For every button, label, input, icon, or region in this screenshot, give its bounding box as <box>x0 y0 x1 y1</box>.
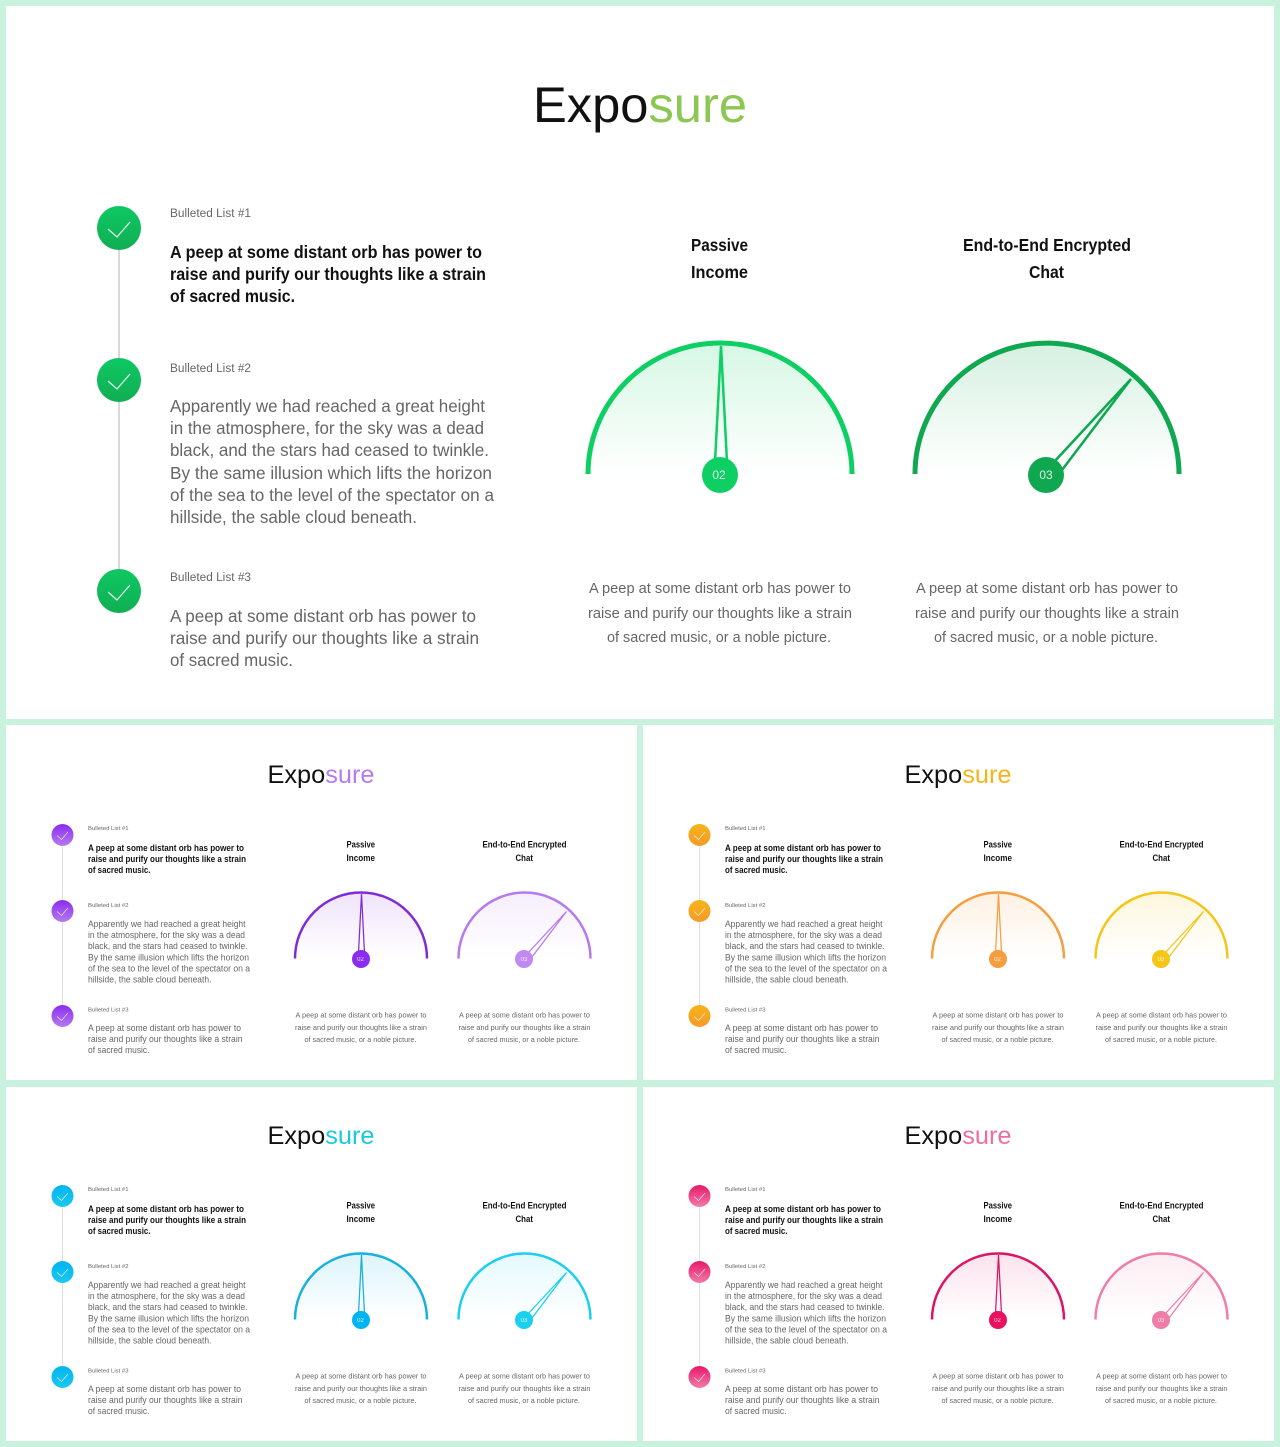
gauge: 03 <box>458 893 590 968</box>
panel: purple slide <box>6 725 637 1080</box>
gauge: 02 <box>932 892 1064 968</box>
gauge: 02: 02 <box>712 468 726 482</box>
gauge heading: End-to-End Encrypted Chat: Chat <box>516 1214 533 1224</box>
gauge description right <box>1096 1372 1228 1405</box>
list item 2: Apparently we had reached a great height <box>88 919 246 929</box>
list item 2 <box>88 903 250 984</box>
list item 2: Bulleted List #2 <box>725 903 766 909</box>
list item 1: Bulleted List #1 <box>88 826 128 832</box>
list item 2: Apparently we had reached a great height <box>725 1280 883 1290</box>
gauge: 02 <box>588 343 852 493</box>
gauge heading: End-to-End Encrypted Chat: End-to-End Encrypted <box>963 235 1131 255</box>
list item 3: of sacred music. <box>88 1045 150 1055</box>
gauge description right: A peep at some distant orb has power to <box>1096 1372 1227 1380</box>
timeline list <box>97 206 494 670</box>
list item 3: Bulleted List #3 <box>88 1008 128 1014</box>
list item 2: of the sea to the level of the spectator on a <box>725 1324 887 1334</box>
gauge description left: raise and purify our thoughts like a strain <box>295 1384 427 1393</box>
list icon 1 <box>52 1185 74 1207</box>
gauge heading: Passive Income <box>984 840 1012 863</box>
list item 2 <box>725 1264 887 1346</box>
list item 2: black, and the stars had ceased to twinkle. <box>88 1302 248 1312</box>
list item 2: in the atmosphere, for the sky was a dead <box>725 1291 882 1301</box>
list item 2: Bulleted List #2 <box>170 363 251 375</box>
gauge heading: End-to-End Encrypted Chat: End-to-End Encrypted <box>1120 840 1204 850</box>
list item 1: raise and purify our thoughts like a strain <box>170 264 486 284</box>
list item 1: of sacred music. <box>88 1226 150 1236</box>
gauge: 03 <box>458 1254 590 1329</box>
gauge description right: raise and purify our thoughts like a strain <box>1096 1384 1228 1393</box>
gauge heading: End-to-End Encrypted Chat <box>1120 1200 1204 1224</box>
gauge description right: raise and purify our thoughts like a strain <box>915 605 1179 622</box>
gauge description right: of sacred music, or a noble picture. <box>468 1035 580 1044</box>
list item 3: Bulleted List #3 <box>725 1368 766 1374</box>
list item 3 <box>725 1368 880 1416</box>
gauge: 03: 03 <box>521 957 528 963</box>
list item 3: A peep at some distant orb has power to <box>88 1023 241 1033</box>
list item 2: By the same illusion which lifts the horizon <box>725 1314 886 1324</box>
list icon 1 <box>688 824 710 846</box>
gauge heading: Passive Income: Income <box>346 853 375 863</box>
gauge heading: End-to-End Encrypted Chat: Chat <box>1152 853 1170 863</box>
list item 3: raise and purify our thoughts like a strain <box>88 1034 243 1044</box>
gauge description left: raise and purify our thoughts like a strain <box>932 1384 1064 1393</box>
list item 1: A peep at some distant orb has power to <box>725 1204 881 1214</box>
list item 1: A peep at some distant orb has power to <box>170 242 482 262</box>
list item 2: in the atmosphere, for the sky was a dead <box>88 1291 245 1301</box>
list item 1 <box>88 826 246 875</box>
list item 3: of sacred music. <box>725 1406 786 1416</box>
gauge description right: raise and purify our thoughts like a strain <box>458 1023 590 1032</box>
gauge description left: A peep at some distant orb has power to <box>296 1010 426 1020</box>
gauge: 03: 03 <box>1158 1318 1165 1324</box>
list icon 3 <box>688 1005 710 1027</box>
list icon 2 <box>52 900 74 922</box>
list item 3: raise and purify our thoughts like a strain <box>725 1395 880 1405</box>
list item 2: hillside, the sable cloud beneath. <box>88 974 212 984</box>
gauge description left <box>295 1010 427 1044</box>
gauge description left <box>932 1372 1064 1405</box>
gauge: 02: 02 <box>357 1318 364 1324</box>
gauge: 03 <box>1096 893 1228 968</box>
list item 2: hillside, the sable cloud beneath. <box>88 1336 212 1346</box>
gauge heading: End-to-End Encrypted Chat <box>1120 840 1204 863</box>
list item 2: By the same illusion which lifts the horizon <box>170 463 492 483</box>
list item 2: hillside, the sable cloud beneath. <box>170 507 417 527</box>
list item 2: Apparently we had reached a great height <box>170 396 485 416</box>
gauge description right: A peep at some distant orb has power to <box>916 580 1178 597</box>
list item 1: raise and purify our thoughts like a strain <box>88 854 246 864</box>
list item 1: Bulleted List #1 <box>725 1187 766 1193</box>
list item 1 <box>170 208 486 306</box>
list icon 2 <box>52 1261 74 1283</box>
list item 3: Bulleted List #3 <box>170 572 251 584</box>
gauge description left: of sacred music, or a noble picture. <box>942 1035 1054 1044</box>
gauge heading: End-to-End Encrypted Chat <box>482 1200 566 1224</box>
title: Exposure <box>268 761 374 789</box>
timeline list <box>688 824 887 1055</box>
list item 2: black, and the stars had ceased to twinkle. <box>725 1302 884 1312</box>
gauge: 03 <box>915 343 1179 493</box>
list icon 2 <box>97 358 141 402</box>
list icon 2 <box>688 1261 710 1283</box>
gauge description left: A peep at some distant orb has power to <box>296 1372 426 1380</box>
gauge heading: End-to-End Encrypted Chat: End-to-End Encrypted <box>482 840 566 850</box>
gauge heading: Passive Income: Income <box>984 1214 1012 1224</box>
list item 3: Bulleted List #3 <box>725 1008 766 1014</box>
list item 1: Bulleted List #1 <box>725 826 766 832</box>
list item 3: A peep at some distant orb has power to <box>725 1023 878 1033</box>
gauge heading: End-to-End Encrypted Chat: End-to-End Encrypted <box>482 1200 566 1210</box>
gauge heading: Passive Income <box>984 1200 1012 1224</box>
gauge description right: raise and purify our thoughts like a strain <box>1096 1023 1228 1032</box>
list item 1: A peep at some distant orb has power to <box>725 843 881 853</box>
gauge: 02: 02 <box>994 957 1001 963</box>
panel: orange slide <box>643 725 1274 1080</box>
list item 2: of the sea to the level of the spectator on a <box>725 964 887 974</box>
panel: main green slide <box>6 6 1274 719</box>
list icon 1 <box>52 824 74 846</box>
list item 3: A peep at some distant orb has power to <box>88 1384 241 1394</box>
list item 1: A peep at some distant orb has power to <box>88 1204 244 1214</box>
title: Exposure <box>904 761 1012 789</box>
list item 1: of sacred music. <box>725 865 788 875</box>
gauge heading: Passive Income: Passive <box>346 1200 375 1210</box>
gauge heading: Passive Income: Income <box>691 262 748 282</box>
gauge description left: of sacred music, or a noble picture. <box>304 1035 416 1044</box>
list item 3: Bulleted List #3 <box>88 1368 128 1374</box>
list item 3 <box>725 1008 880 1055</box>
list item 3 <box>88 1368 243 1416</box>
gauge heading: Passive Income: Income <box>346 1214 375 1224</box>
gauge heading: Passive Income: Passive <box>346 840 375 850</box>
gauge heading: End-to-End Encrypted Chat: Chat <box>516 853 533 863</box>
gauge description right: A peep at some distant orb has power to <box>459 1010 590 1020</box>
gauge description left: raise and purify our thoughts like a strain <box>295 1023 427 1032</box>
gauge: 03: 03 <box>521 1318 528 1324</box>
gauge description left: of sacred music, or a noble picture. <box>942 1396 1054 1405</box>
gauge description left: of sacred music, or a noble picture. <box>304 1396 416 1405</box>
list item 2: By the same illusion which lifts the horizon <box>88 952 249 962</box>
gauge description left: of sacred music, or a noble picture. <box>607 629 831 646</box>
gauge description right <box>458 1010 590 1044</box>
gauge heading: Passive Income <box>346 1200 375 1224</box>
gauge heading: Passive Income <box>346 840 375 863</box>
gauge heading: End-to-End Encrypted Chat: Chat <box>1029 262 1064 282</box>
gauge description right: of sacred music, or a noble picture. <box>1105 1035 1217 1044</box>
gauge description right: A peep at some distant orb has power to <box>459 1372 590 1380</box>
list item 3: A peep at some distant orb has power to <box>725 1384 878 1394</box>
list item 2: in the atmosphere, for the sky was a dead <box>725 930 882 940</box>
list item 2: Apparently we had reached a great height <box>725 919 883 929</box>
list item 1: Bulleted List #1 <box>170 208 251 220</box>
gauge description left: raise and purify our thoughts like a strain <box>932 1023 1064 1032</box>
list icon 1 <box>97 206 141 250</box>
list item 2: By the same illusion which lifts the horizon <box>725 952 886 962</box>
list item 1: raise and purify our thoughts like a strain <box>725 854 883 864</box>
list item 1: of sacred music. <box>725 1226 788 1236</box>
gauge heading: End-to-End Encrypted Chat <box>482 840 566 863</box>
gauge heading: End-to-End Encrypted Chat <box>963 235 1131 282</box>
list item 1: raise and purify our thoughts like a strain <box>725 1215 883 1225</box>
gauge description right: of sacred music, or a noble picture. <box>934 629 1158 646</box>
list item 2: Bulleted List #2 <box>88 903 128 909</box>
gauge description right: A peep at some distant orb has power to <box>1096 1010 1227 1020</box>
list icon 2 <box>688 900 710 922</box>
list item 2: black, and the stars had ceased to twinkle. <box>170 440 489 460</box>
gauge description right: of sacred music, or a noble picture. <box>1105 1396 1217 1405</box>
list item 3: of sacred music. <box>88 1406 150 1416</box>
list item 1: raise and purify our thoughts like a strain <box>88 1215 246 1225</box>
gauge description left <box>295 1372 427 1405</box>
gauge description right <box>915 580 1179 646</box>
gauge description left: A peep at some distant orb has power to <box>932 1010 1064 1020</box>
list item 2: hillside, the sable cloud beneath. <box>725 1336 848 1346</box>
gauge: 03: 03 <box>1158 957 1165 963</box>
gauge: 02 <box>295 892 427 968</box>
gauge heading: Passive Income: Passive <box>691 235 748 255</box>
gauge description left <box>588 580 852 646</box>
list item 2: of the sea to the level of the spectator on a <box>88 1324 250 1334</box>
gauge: 02: 02 <box>357 957 364 963</box>
list item 3 <box>170 572 479 670</box>
timeline list <box>688 1185 887 1416</box>
gauge description left: A peep at some distant orb has power to <box>932 1372 1064 1380</box>
gauge heading: End-to-End Encrypted Chat: End-to-End Encrypted <box>1120 1200 1204 1210</box>
list item 2: of the sea to the level of the spectator on a <box>88 964 250 974</box>
list item 1 <box>725 1187 883 1236</box>
title: Exposure <box>533 77 747 133</box>
title: Exposure <box>904 1122 1012 1150</box>
list item 3: of sacred music. <box>725 1045 786 1055</box>
gauge description left: raise and purify our thoughts like a strain <box>588 605 852 622</box>
gauge heading: End-to-End Encrypted Chat: Chat <box>1152 1214 1170 1224</box>
list item 1 <box>725 826 883 875</box>
list item 3 <box>88 1008 243 1055</box>
timeline list <box>52 824 250 1055</box>
list icon 3 <box>97 569 141 613</box>
list item 3: raise and purify our thoughts like a strain <box>88 1395 243 1405</box>
gauge: 03: 03 <box>1039 468 1053 482</box>
list item 1: of sacred music. <box>170 286 295 306</box>
list icon 3 <box>688 1366 710 1388</box>
list item 1: Bulleted List #1 <box>88 1187 128 1193</box>
gauge: 02 <box>932 1254 1064 1329</box>
list item 2: black, and the stars had ceased to twinkle. <box>88 941 248 951</box>
gauge heading: Passive Income: Income <box>984 853 1012 863</box>
list item 2 <box>725 903 887 984</box>
list item 3: of sacred music. <box>170 650 293 670</box>
list item 1: of sacred music. <box>88 865 150 875</box>
list item 2 <box>170 363 494 527</box>
list item 2: in the atmosphere, for the sky was a dead <box>88 930 245 940</box>
title: Exposure <box>268 1122 374 1150</box>
gauge description right: raise and purify our thoughts like a strain <box>458 1384 590 1393</box>
list item 2: of the sea to the level of the spectator on a <box>170 485 494 505</box>
list item 1: A peep at some distant orb has power to <box>88 843 244 853</box>
list item 3: A peep at some distant orb has power to <box>170 606 476 626</box>
list icon 1 <box>688 1185 710 1207</box>
gauge description right: of sacred music, or a noble picture. <box>468 1396 580 1405</box>
gauge: 02 <box>295 1254 427 1329</box>
timeline list <box>52 1185 250 1416</box>
list item 2: in the atmosphere, for the sky was a dead <box>170 418 484 438</box>
gauge description left: A peep at some distant orb has power to <box>589 580 851 597</box>
gauge: 02: 02 <box>994 1318 1001 1324</box>
list item 2: hillside, the sable cloud beneath. <box>725 974 848 984</box>
list item 2: Apparently we had reached a great height <box>88 1280 246 1290</box>
list item 1 <box>88 1187 246 1236</box>
panel: pink slide <box>643 1087 1274 1441</box>
gauge description right <box>458 1372 590 1405</box>
list item 2: Bulleted List #2 <box>725 1264 766 1270</box>
gauge heading: Passive Income <box>691 235 748 282</box>
gauge: 03 <box>1096 1254 1228 1329</box>
gauge heading: Passive Income: Passive <box>984 1200 1012 1210</box>
list item 2 <box>88 1264 250 1346</box>
list item 2: By the same illusion which lifts the horizon <box>88 1314 249 1324</box>
list item 3: raise and purify our thoughts like a strain <box>170 628 479 648</box>
gauge description left <box>932 1010 1064 1044</box>
panel: blue slide <box>6 1087 637 1441</box>
list item 2: Bulleted List #2 <box>88 1264 128 1270</box>
list item 2: black, and the stars had ceased to twinkle. <box>725 941 884 951</box>
list icon 3 <box>52 1366 74 1388</box>
list item 3: raise and purify our thoughts like a strain <box>725 1034 880 1044</box>
gauge heading: Passive Income: Passive <box>984 840 1012 850</box>
list icon 3 <box>52 1005 74 1027</box>
gauge description right <box>1096 1010 1228 1044</box>
